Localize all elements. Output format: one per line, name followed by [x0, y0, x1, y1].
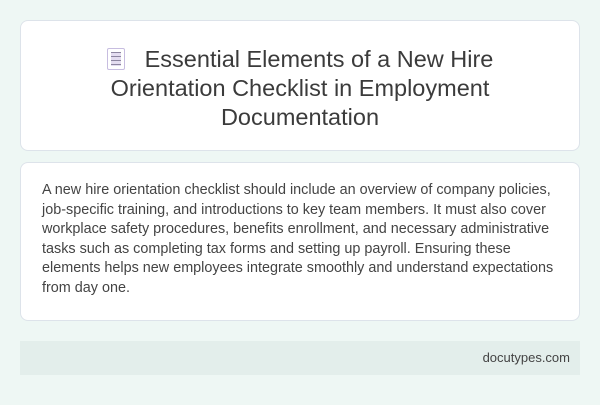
text block: A new hire orientation checklist should include an overview of company policies, — [42, 182, 551, 198]
title: Essential Elements of a New Hire Orientation Checklist in Employment Documentation — [111, 46, 493, 130]
text block: workplace safety procedures, benefits enrollment, and necessary administrative — [42, 221, 549, 237]
text block: job-specific training, and introductions to key team members. It must also cover — [42, 202, 546, 218]
footer text: docutypes.com — [483, 350, 570, 365]
text block — [42, 182, 553, 296]
text block: elements helps new employees integrate smoothly and understand expectations — [42, 260, 553, 276]
panel: description — [20, 162, 580, 321]
text block: tasks such as completing tax forms and setting up payroll. Ensuring these — [42, 240, 511, 256]
icon: document — [107, 48, 125, 70]
panel: title — [20, 20, 580, 151]
footer — [20, 341, 580, 375]
text block: from day one. — [42, 280, 130, 296]
